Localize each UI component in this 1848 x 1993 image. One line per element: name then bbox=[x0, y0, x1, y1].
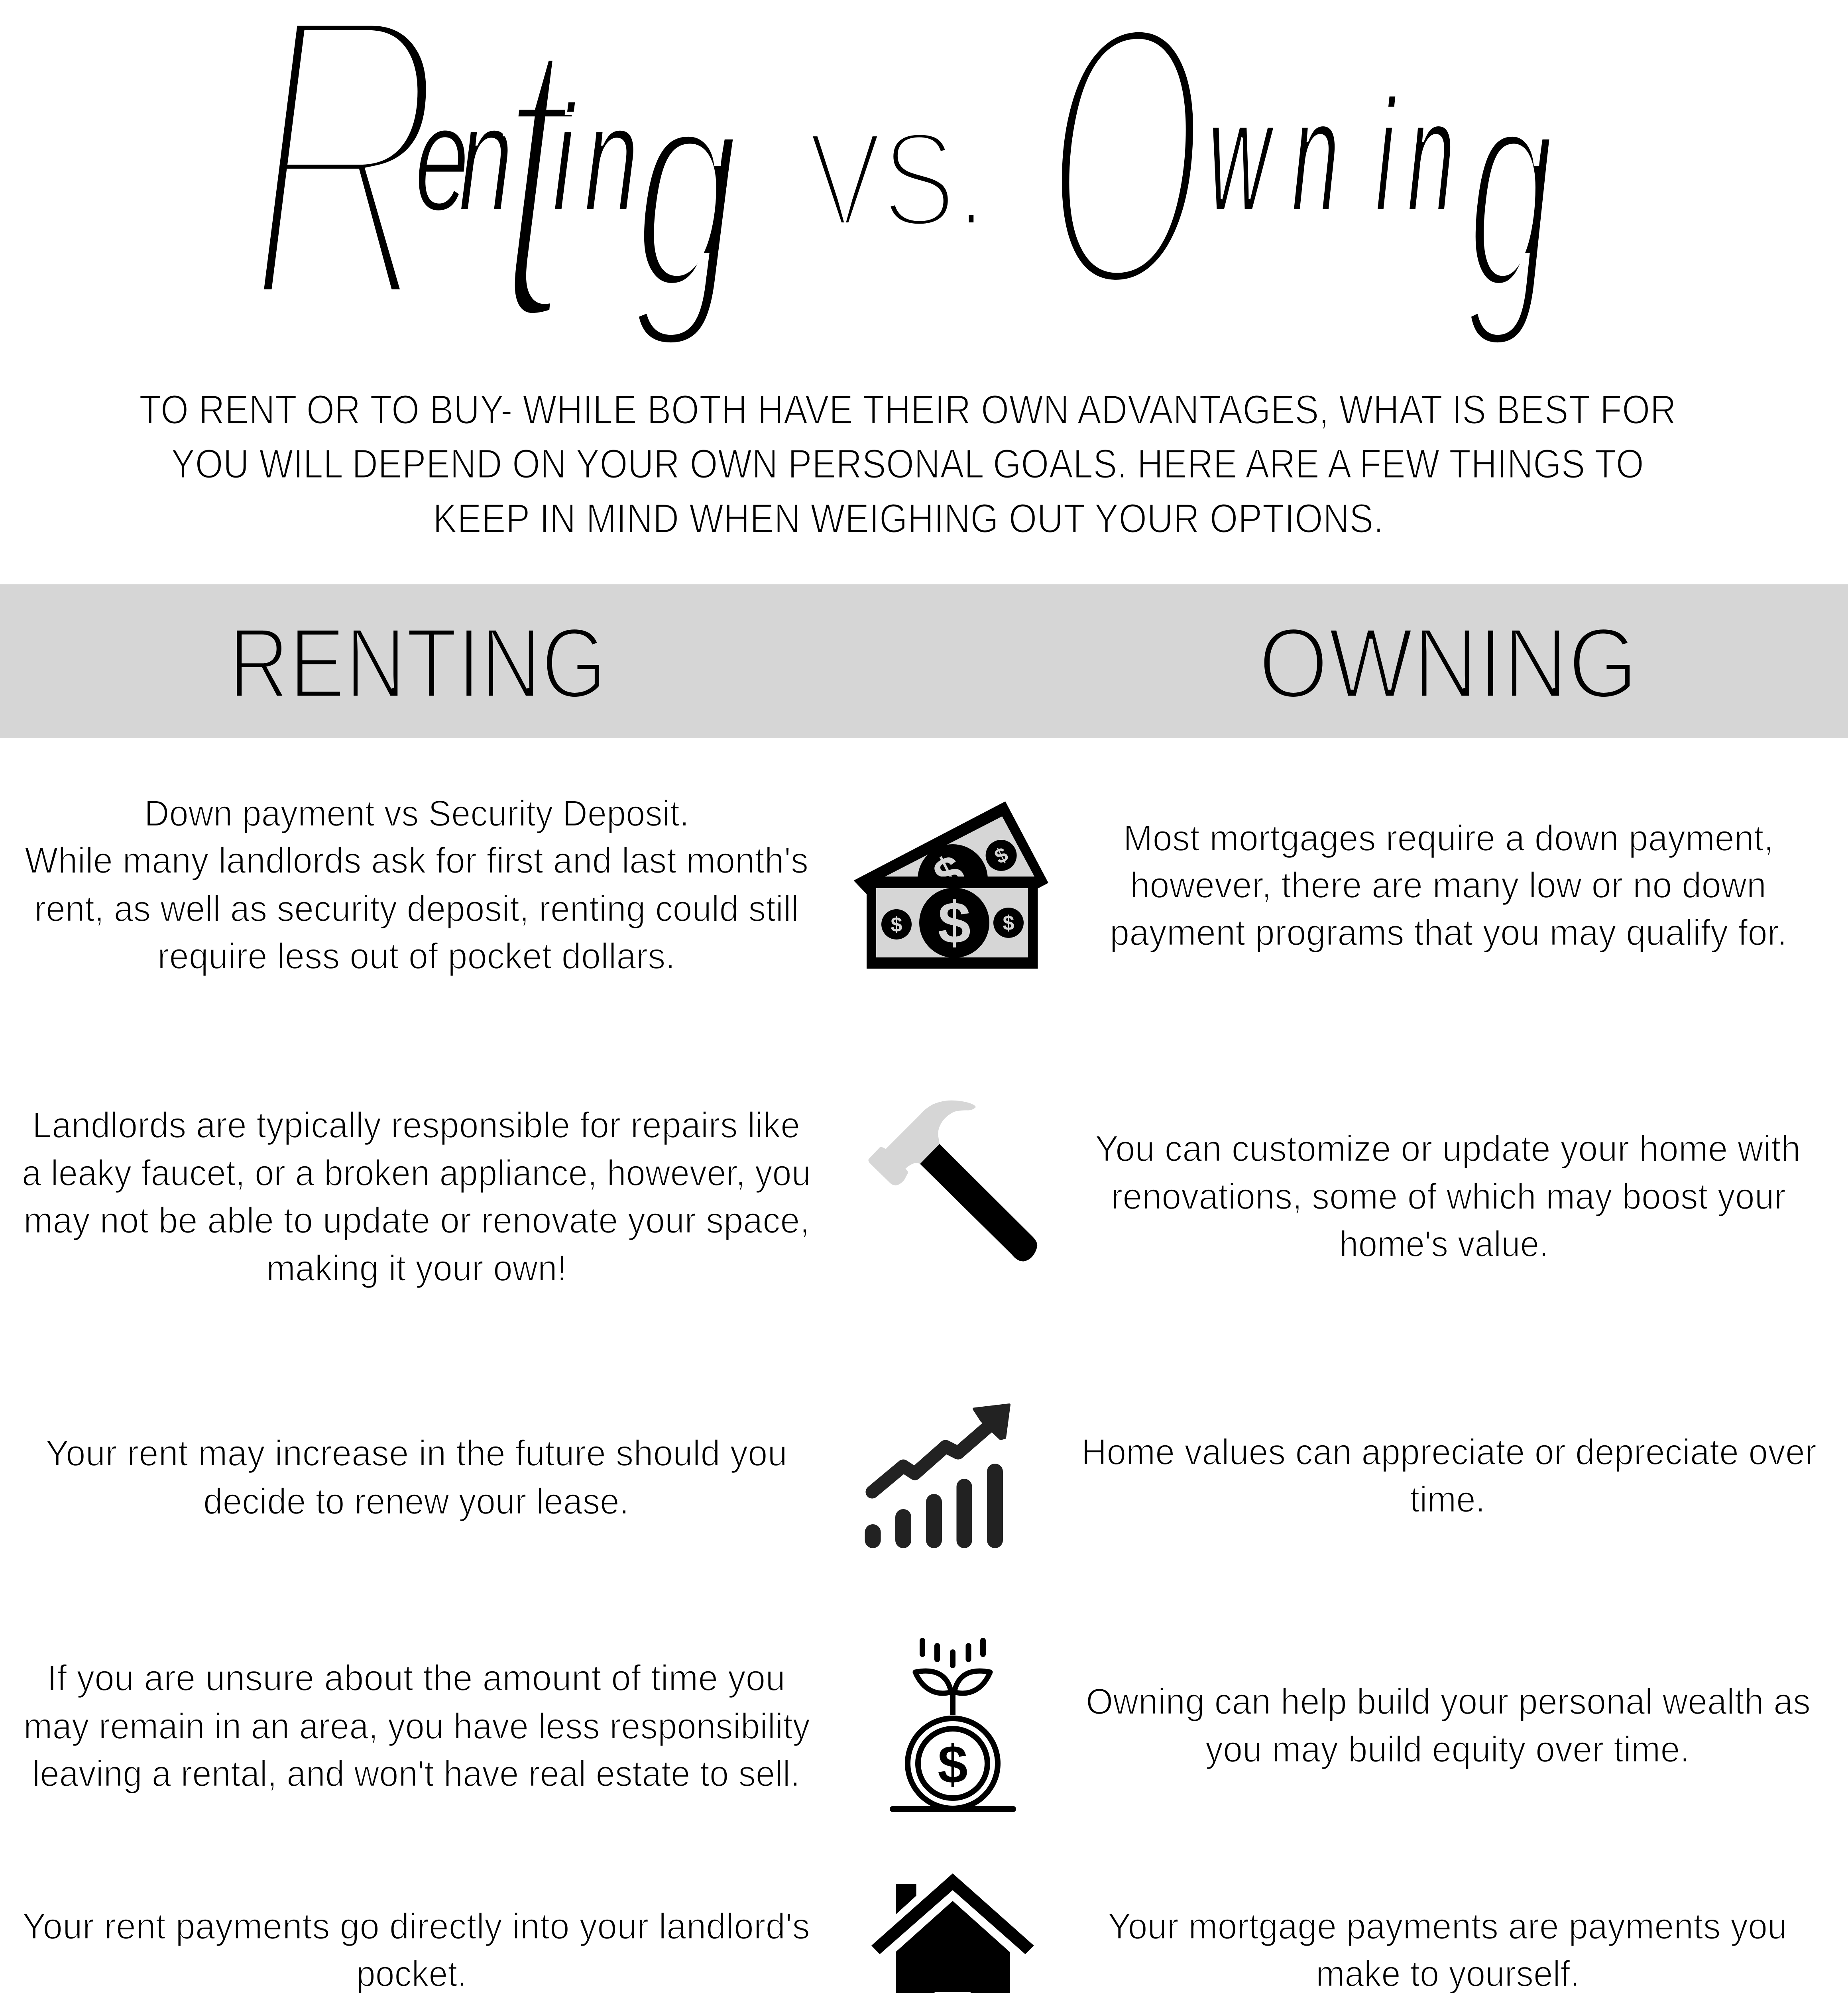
owning text: down payment bbox=[1110, 818, 1787, 953]
owning text: down payment: Most mortgages require a down payment, bbox=[1123, 818, 1773, 859]
renting text: down payment bbox=[25, 793, 808, 977]
title word: Owning: w bbox=[1208, 67, 1275, 245]
header band bbox=[0, 584, 1848, 738]
renting text: rent increase: decide to renew your lease. bbox=[203, 1481, 629, 1522]
owning text: mortgage payments: make to yourself. bbox=[1316, 1954, 1580, 1993]
renting text: down payment: rent, as well as security deposit, renting could still bbox=[34, 888, 799, 929]
title word: Owning: n bbox=[1292, 67, 1339, 245]
intro text: YOU WILL DEPEND ON YOUR OWN PERSONAL GOALS. HERE ARE A FEW THINGS TO bbox=[171, 441, 1644, 487]
renting text: flexibility: leaving a rental, and won't have real estate to sell. bbox=[32, 1753, 800, 1794]
owning text: equity: Owning can help build your personal wealth as bbox=[1086, 1681, 1811, 1722]
owning text: equity: you may build equity over time. bbox=[1205, 1729, 1690, 1770]
renting text: repairs: Landlords are typically responsible for repairs like bbox=[32, 1105, 800, 1146]
renting text: repairs: may not be able to update or renovate your space, bbox=[24, 1200, 810, 1241]
title word: Renting: e bbox=[415, 73, 469, 243]
icon: money bills: $ bbox=[991, 843, 1012, 869]
icon: house bbox=[871, 1873, 1034, 1993]
icon: money plant coin bbox=[890, 1638, 1016, 1812]
icon: growth chart bbox=[865, 1405, 1009, 1548]
title word: Renting: n bbox=[458, 73, 513, 243]
renting text: flexibility bbox=[24, 1658, 810, 1794]
renting text: rent increase: Your rent may increase in the future should you bbox=[45, 1433, 787, 1474]
renting text: flexibility: may remain in an area, you have less responsibility bbox=[24, 1706, 810, 1747]
renting text: down payment: require less out of pocket dollars. bbox=[157, 936, 675, 977]
renting text: down payment: While many landlords ask for first and last month's bbox=[25, 840, 808, 881]
renting text: rent increase bbox=[45, 1433, 787, 1522]
renting text: repairs: a leaky faucet, or a broken appliance, however, you bbox=[22, 1153, 811, 1193]
intro text: TO RENT OR TO BUY- WHILE BOTH HAVE THEIR OWN ADVANTAGES, WHAT IS BEST FOR bbox=[139, 387, 1676, 432]
owning text: mortgage payments: Your mortgage payments are payments you bbox=[1108, 1906, 1787, 1947]
title word: Owning: n bbox=[1407, 67, 1455, 245]
title word: vs.: VS. bbox=[808, 104, 987, 255]
title word: Renting: i bbox=[552, 73, 577, 243]
icon: money bills: $ bbox=[891, 913, 902, 936]
icon: money bills: $ bbox=[938, 890, 971, 956]
owning text: down payment: payment programs that you may qualify for. bbox=[1110, 912, 1787, 953]
renting text: repairs bbox=[22, 1105, 811, 1289]
owning text: mortgage payments bbox=[1108, 1906, 1787, 1993]
heading: renting: RENTING bbox=[228, 607, 607, 719]
icon: money bills: $ bbox=[926, 844, 973, 903]
title word: Owning: g bbox=[1467, 24, 1556, 352]
renting text: repairs: making it your own! bbox=[266, 1248, 567, 1289]
title word: Renting: g bbox=[634, 24, 741, 352]
intro text bbox=[139, 387, 1676, 541]
owning text: down payment: however, there are many low or no down bbox=[1130, 865, 1766, 906]
renting text: down payment: Down payment vs Security Deposit. bbox=[144, 793, 689, 834]
renting text: landlord's pocket: pocket. bbox=[356, 1954, 467, 1993]
renting text: landlord's pocket: Your rent payments go directly into your landlord's bbox=[22, 1906, 810, 1947]
icon: hammer bbox=[868, 1101, 1037, 1262]
owning text: home values: time. bbox=[1410, 1479, 1485, 1520]
renting text: flexibility: If you are unsure about the amount of time you bbox=[47, 1658, 785, 1698]
owning text: renovations: You can customize or update your home with bbox=[1095, 1128, 1801, 1169]
owning text: renovations bbox=[1095, 1128, 1801, 1264]
intro text: KEEP IN MIND WHEN WEIGHING OUT YOUR OPTIONS. bbox=[433, 495, 1384, 541]
title word: Owning: i bbox=[1375, 67, 1397, 245]
owning text: home values: Home values can appreciate or depreciate over bbox=[1081, 1432, 1817, 1472]
owning text: renovations: home's value. bbox=[1339, 1224, 1549, 1264]
heading: owning: OWNING bbox=[1258, 607, 1638, 719]
title bbox=[245, 0, 1556, 407]
icon: money plant coin: $ bbox=[938, 1734, 968, 1794]
owning text: renovations: renovations, some of which may boost your bbox=[1111, 1176, 1786, 1217]
renting text: landlord's pocket bbox=[22, 1906, 810, 1993]
icon: money bills: $ bbox=[1003, 912, 1014, 935]
title word: Renting: n bbox=[584, 73, 639, 243]
owning text: equity bbox=[1086, 1681, 1811, 1770]
icon: money bills bbox=[854, 801, 1048, 969]
owning text: home values bbox=[1081, 1432, 1817, 1520]
